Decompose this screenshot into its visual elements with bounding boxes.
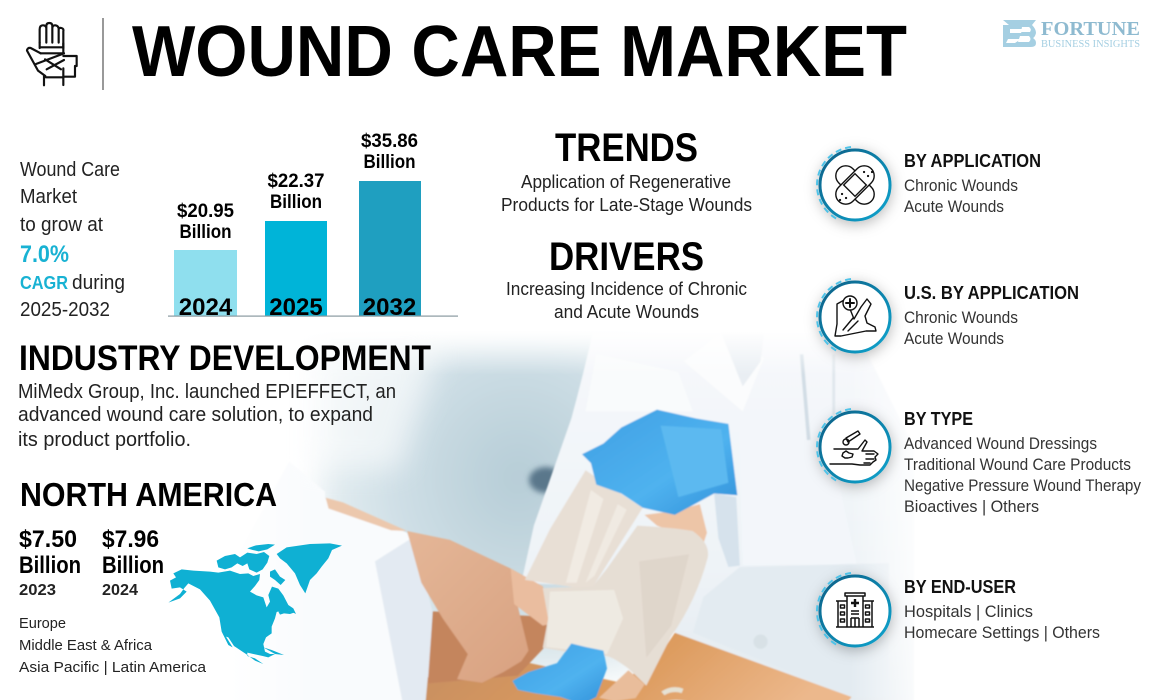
text: by type: Traditional Wound Care Products xyxy=(904,456,1131,474)
text: by application: Chronic Wounds xyxy=(904,177,1018,195)
cuff xyxy=(714,494,740,567)
text: CAGR growth statement: 2025-2032 xyxy=(20,299,110,321)
stat: 2023 value: 2023 xyxy=(19,582,56,599)
text: CAGR growth statement: CAGR xyxy=(20,273,68,293)
icon: leg wound with cross, U.S. by application xyxy=(817,279,890,352)
text: CAGR growth statement: Market xyxy=(20,186,77,208)
bar chart: market size 2024, 2025, 2032: Billion xyxy=(364,152,416,173)
stat: 2023 value: Billion xyxy=(19,552,81,579)
text: other regions: Asia Pacific | Latin America xyxy=(19,659,207,676)
text: industry development body xyxy=(18,381,396,451)
heading: industry development: INDUSTRY DEVELOPMENT xyxy=(19,339,431,378)
text: by type: BY TYPE xyxy=(904,409,973,429)
text: other regions: Middle East & Africa xyxy=(19,637,153,654)
text: CAGR growth statement xyxy=(20,159,125,321)
text: drivers body xyxy=(506,279,747,322)
table xyxy=(423,633,852,700)
patient's coat xyxy=(229,461,432,700)
text: by end-user: BY END-USER xyxy=(904,577,1016,597)
text: trends body: Application of Regenerative xyxy=(521,172,731,192)
icon: bandage, by application xyxy=(817,147,890,220)
text: CAGR growth statement: Wound Care xyxy=(20,159,120,181)
icon: hand with dressing, by type xyxy=(817,409,890,482)
logo: Fortune Business Insights xyxy=(1003,18,1140,50)
text: by application: BY APPLICATION xyxy=(904,151,1041,171)
icon: hospital, by end-user xyxy=(817,573,890,646)
logo: Fortune Business Insights: BUSINESS INSIGHTS xyxy=(1041,39,1140,50)
text: other regions xyxy=(19,615,207,676)
text: U.S. by application: U.S. BY APPLICATION xyxy=(904,283,1079,303)
stat: 2024 value xyxy=(102,526,164,599)
foot bandage xyxy=(543,526,708,686)
text: U.S. by application: Acute Wounds xyxy=(904,330,1004,348)
text: U.S. by application xyxy=(904,283,1079,348)
logo: Fortune Business Insights: FORTUNE xyxy=(1041,18,1140,40)
text: by type: Advanced Wound Dressings xyxy=(904,435,1097,453)
bar chart: market size 2024, 2025, 2032: 2024 xyxy=(179,294,233,321)
icon: bandaged hand xyxy=(27,23,77,85)
text: by end-user: Homecare Settings | Others xyxy=(904,624,1100,642)
heading: trends: TRENDS xyxy=(555,126,698,170)
text: by type xyxy=(904,409,1142,516)
text: CAGR growth statement: to grow at xyxy=(20,214,103,236)
heel xyxy=(599,670,645,700)
bar chart: market size 2024, 2025, 2032: Billion xyxy=(180,222,232,243)
heading: drivers: DRIVERS xyxy=(549,235,704,279)
text: by application: Acute Wounds xyxy=(904,198,1004,216)
text: other regions: Europe xyxy=(19,615,66,632)
text: CAGR growth statement: during xyxy=(72,272,125,294)
stat: 2024 value: Billion xyxy=(102,552,164,579)
text: by end-user: Hospitals | Clinics xyxy=(904,603,1033,621)
bar chart: market size 2024, 2025, 2032: 2032 xyxy=(363,294,416,321)
bar chart: market size 2024, 2025, 2032: $22.37 xyxy=(268,171,324,192)
header divider xyxy=(102,18,104,90)
map: North America xyxy=(168,543,342,664)
bar chart: market size 2024, 2025, 2032: 2025 xyxy=(269,294,323,321)
stat: 2023 value: $7.50 xyxy=(19,526,77,553)
title: WOUND CARE MARKET xyxy=(132,12,907,92)
bar chart: market size 2024, 2025, 2032 xyxy=(168,131,458,321)
text: by type: Negative Pressure Wound Therapy xyxy=(904,477,1142,495)
text: trends body xyxy=(501,172,752,215)
bandage scraps xyxy=(661,687,687,700)
fades xyxy=(230,330,990,375)
bar chart: market size 2024, 2025, 2032: $35.86 xyxy=(361,131,418,152)
lower glove xyxy=(512,643,607,700)
bandage strip xyxy=(525,470,643,590)
text: industry development body: its product portfolio. xyxy=(18,429,191,451)
doctor's coat xyxy=(521,333,914,700)
text: CAGR growth statement: 7.0% xyxy=(20,241,69,268)
heading: north america: NORTH AMERICA xyxy=(20,476,277,513)
text: industry development body: MiMedx Group, Inc. launched EPIEFFECT, an xyxy=(18,381,396,403)
text: industry development body: advanced wound care solution, to expand xyxy=(18,404,373,426)
toes xyxy=(645,504,707,543)
stat: 2024 value: 2024 xyxy=(102,582,138,599)
bar chart: market size 2024, 2025, 2032: $20.95 xyxy=(177,201,234,222)
text: by application xyxy=(904,151,1041,216)
text: trends body: Products for Late-Stage Wounds xyxy=(501,195,752,215)
text: U.S. by application: Chronic Wounds xyxy=(904,309,1018,327)
text: by type: Bioactives | Others xyxy=(904,498,1039,516)
upper glove xyxy=(582,410,737,515)
stat: 2024 value: $7.96 xyxy=(102,526,159,553)
text: by end-user xyxy=(904,577,1100,642)
text: drivers body: Increasing Incidence of Chronic xyxy=(506,279,747,299)
stat: 2023 value xyxy=(19,526,81,599)
bar chart: market size 2024, 2025, 2032: Billion xyxy=(270,192,322,213)
text: drivers body: and Acute Wounds xyxy=(554,302,699,322)
patient's arm and hand xyxy=(326,498,407,531)
